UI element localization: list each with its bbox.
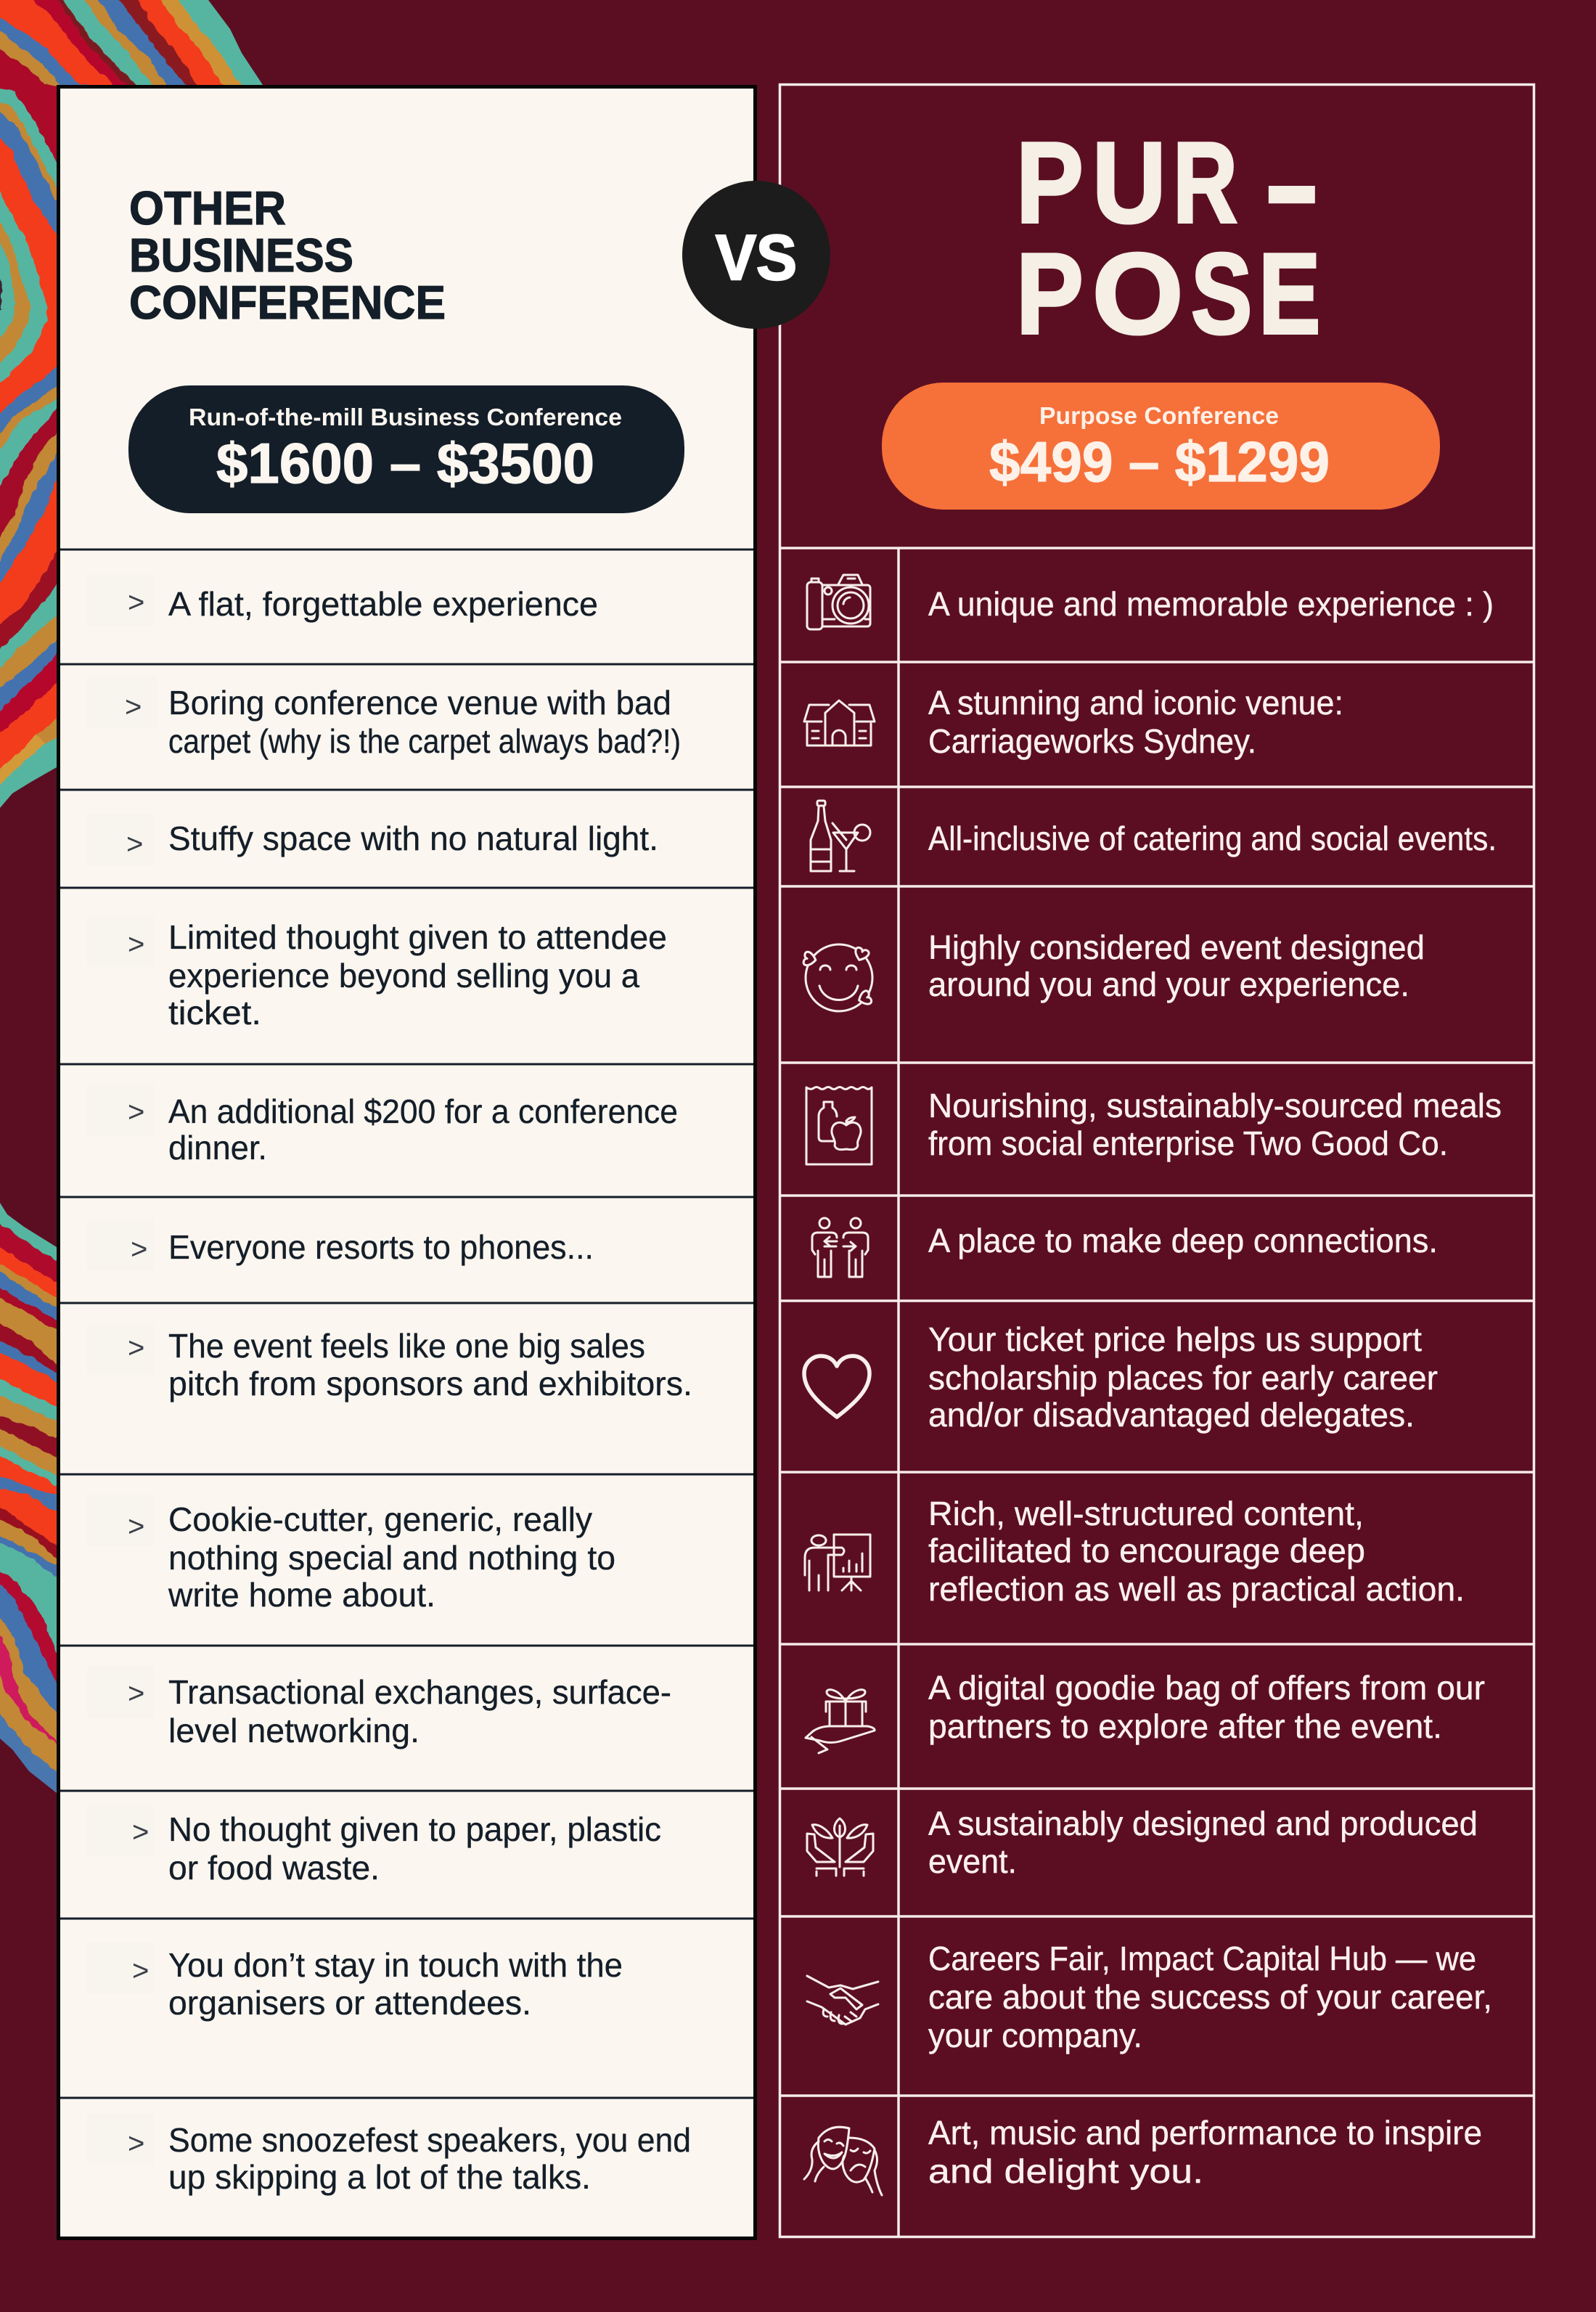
- right row 9: A digital goodie bag of offers from our: [928, 1669, 1485, 1707]
- price pill: run-of-the-mill: [128, 385, 684, 513]
- icon: meal bag: [806, 1087, 872, 1164]
- left row 2: carpet (why is the carpet always bad?!): [168, 722, 681, 760]
- right row 7: scholarship places for early career: [928, 1359, 1438, 1397]
- left row 11: organisers or attendees.: [168, 1984, 531, 2022]
- left row 9: [87, 1667, 671, 1749]
- left row 8: nothing special and nothing to: [168, 1539, 615, 1577]
- right row 10: event.: [928, 1842, 1017, 1880]
- panel: purpose: [779, 84, 1534, 2237]
- left row 9: Transactional exchanges, surface-: [168, 1673, 671, 1711]
- left row 12: Some snoozefest speakers, you end: [168, 2121, 691, 2159]
- left row 3: [87, 814, 658, 865]
- painted pattern: top left: [0, 0, 263, 808]
- left row 11: [87, 1943, 623, 2022]
- heading: pur-pose: [1016, 99, 1322, 358]
- left row 5: >: [128, 1096, 144, 1128]
- right row 11: care about the success of your career,: [928, 1978, 1492, 2016]
- left row 7: The event feels like one big sales: [168, 1327, 645, 1365]
- left row 12: [87, 2114, 691, 2196]
- heading: pur-pose: U: [1092, 118, 1166, 247]
- left row 7: [87, 1324, 692, 1402]
- heading: pur-pose: P: [1016, 118, 1084, 247]
- left row 7: pitch from sponsors and exhibitors.: [168, 1365, 692, 1402]
- icon: gift on hand: [806, 1690, 875, 1753]
- left row 8: write home about.: [168, 1576, 435, 1614]
- left row 9: level networking.: [168, 1712, 420, 1749]
- icon: hands with plant: [807, 1818, 873, 1876]
- left row 2: [87, 677, 681, 760]
- left row 1: >: [128, 587, 144, 618]
- left row 10: >: [132, 1816, 149, 1848]
- right row 5: from social enterprise Two Good Co.: [928, 1124, 1448, 1162]
- icon: presenter: [805, 1535, 870, 1590]
- left row 6: Everyone resorts to phones...: [168, 1228, 594, 1266]
- right row 11: your company.: [928, 2017, 1142, 2054]
- right row 10: [928, 1805, 1478, 1880]
- heading: pur-pose: P: [1016, 229, 1084, 358]
- left row 12: up skipping a lot of the talks.: [168, 2158, 591, 2196]
- icon: heart: [804, 1356, 869, 1417]
- right row 11: Careers Fair, Impact Capital Hub — we: [928, 1940, 1476, 1977]
- right row 7: and/or disadvantaged delegates.: [928, 1396, 1415, 1434]
- left row 4: >: [128, 928, 144, 960]
- right row 8: reflection as well as practical action.: [928, 1570, 1465, 1608]
- right row 7: [928, 1320, 1438, 1434]
- left row 4: ticket.: [168, 994, 261, 1032]
- right row 9: [928, 1669, 1485, 1745]
- right row 5: Nourishing, sustainably-sourced meals: [928, 1087, 1502, 1124]
- right row 10: A sustainably designed and produced: [928, 1805, 1478, 1842]
- right row 2: Carriageworks Sydney.: [928, 722, 1256, 760]
- right row 4: Highly considered event designed: [928, 928, 1425, 966]
- price pill: purpose conference: Purpose Conference: [1039, 402, 1279, 429]
- heading: pur-pose: O: [1092, 229, 1183, 358]
- left row 1: [87, 575, 598, 626]
- vs badge: VS: [716, 221, 797, 293]
- left row 5: An additional $200 for a conference: [168, 1092, 678, 1130]
- right row 3: All-inclusive of catering and social events.: [928, 820, 1497, 857]
- left row 8: Cookie-cutter, generic, really: [168, 1500, 592, 1538]
- left row 5: [87, 1084, 678, 1167]
- heading: pur-pose: -: [1261, 99, 1322, 265]
- right row 6: A place to make deep connections.: [928, 1222, 1438, 1259]
- right row 12: Art, music and performance to inspire: [928, 2114, 1482, 2152]
- vs badge: [682, 181, 830, 329]
- price pill: run-of-the-mill: Run-of-the-mill Business Conference: [189, 404, 622, 430]
- right row 12: [928, 2114, 1482, 2190]
- right row 5: [928, 1087, 1502, 1162]
- heading: pur-pose: S: [1191, 230, 1252, 358]
- icon: smiling face with hearts: [803, 944, 872, 1011]
- right row 8: Rich, well-structured content,: [928, 1495, 1364, 1532]
- right row 8: facilitated to encourage deep: [928, 1532, 1365, 1569]
- right row 4: around you and your experience.: [928, 965, 1409, 1003]
- right row 12: and delight you.: [928, 2152, 1203, 2190]
- right row 1: A unique and memorable experience : ): [928, 585, 1494, 623]
- left row 5: dinner.: [168, 1129, 267, 1167]
- painted pattern: lower left: [0, 1203, 57, 1793]
- price pill: purpose conference: [882, 383, 1440, 510]
- left row 4: experience beyond selling you a: [168, 957, 639, 994]
- right row 8: [928, 1495, 1465, 1608]
- left row 10: [87, 1805, 661, 1887]
- right row 11: [928, 1940, 1492, 2054]
- icon: venue: [804, 700, 875, 746]
- right row 7: Your ticket price helps us support: [928, 1320, 1422, 1358]
- price pill: run-of-the-mill: $1600 – $3500: [216, 431, 594, 495]
- right row 9: partners to explore after the event.: [928, 1707, 1442, 1745]
- heading: other business conference: BUSINESS: [129, 229, 353, 282]
- left row 8: [87, 1495, 615, 1614]
- right row 4: [928, 928, 1425, 1003]
- left row 6: >: [131, 1233, 147, 1265]
- left row 3: Stuffy space with no natural light.: [168, 820, 658, 857]
- heading: pur-pose: R: [1173, 119, 1237, 248]
- left row 11: You don’t stay in touch with the: [168, 1946, 623, 1984]
- left row 10: or food waste.: [168, 1849, 380, 1887]
- icon: camera: [807, 575, 870, 629]
- icon: bottle and cocktail: [811, 801, 870, 871]
- left row 6: [87, 1220, 594, 1270]
- left row 8: >: [128, 1511, 144, 1543]
- left row 4: [87, 916, 667, 1032]
- icon: people connecting: [812, 1218, 868, 1277]
- left row 4: Limited thought given to attendee: [168, 918, 667, 956]
- price pill: purpose conference: $499 – $1299: [989, 430, 1330, 494]
- left row 1: A flat, forgettable experience: [168, 585, 598, 623]
- left row 7: >: [128, 1332, 144, 1364]
- heading: other business conference: OTHER: [129, 181, 286, 234]
- left row 11: >: [132, 1955, 149, 1987]
- panel: other business conference: [58, 87, 755, 2239]
- left row 3: >: [126, 828, 143, 860]
- icon: handshake: [807, 1976, 878, 2025]
- right row 2: A stunning and iconic venue:: [928, 684, 1343, 722]
- heading: other business conference: [129, 181, 446, 329]
- right row 2: [928, 684, 1343, 760]
- left row 10: No thought given to paper, plastic: [168, 1810, 661, 1848]
- heading: pur-pose: E: [1259, 230, 1320, 358]
- left row 12: >: [128, 2128, 144, 2160]
- left row 2: >: [125, 691, 142, 723]
- left row 2: Boring conference venue with bad: [168, 684, 671, 722]
- left row 9: >: [128, 1678, 144, 1710]
- heading: other business conference: CONFERENCE: [129, 276, 446, 329]
- icon: theatre masks: [804, 2127, 882, 2195]
